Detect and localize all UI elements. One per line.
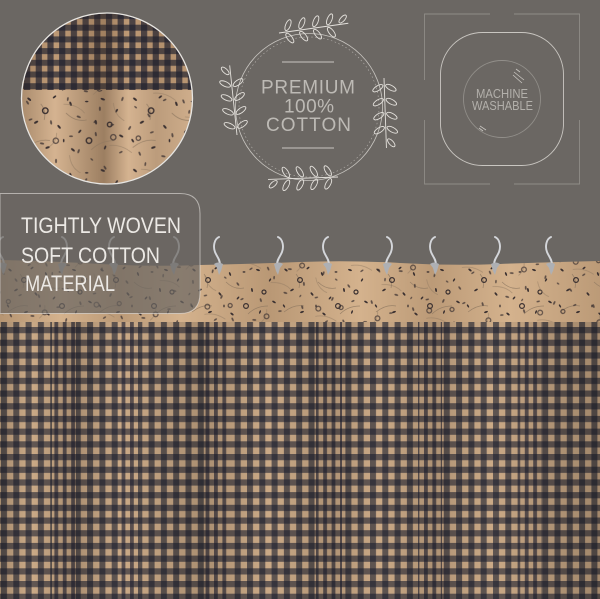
wreath text [261, 78, 355, 136]
panel: tightly woven soft cotton material [0, 194, 200, 314]
callout text: TIGHTLY WOVEN [21, 213, 181, 238]
callout text [21, 213, 181, 296]
rounded square [440, 32, 564, 166]
curtain: shower curtain with check body and floral header [0, 258, 600, 599]
wreath text: 100% [284, 96, 334, 118]
wreath text: COTTON [266, 115, 351, 136]
callout text: MATERIAL [25, 271, 115, 296]
badge: premium 100% cotton wreath [217, 11, 399, 192]
inset floral fabric [20, 90, 195, 186]
inset check fabric [20, 12, 195, 92]
glass glints [479, 69, 524, 131]
callout text: SOFT COTTON [21, 243, 160, 268]
wreath divider lines [282, 62, 334, 148]
corner brackets [424, 14, 580, 184]
check fabric body [0, 322, 600, 599]
wreath rings [236, 34, 382, 180]
inset: fabric close-up circle [20, 12, 195, 186]
machine washable text [472, 86, 533, 113]
inner circle [464, 60, 540, 138]
inset ring [22, 13, 192, 184]
wreath leaves [217, 11, 399, 192]
machine washable text: WASHABLE [472, 98, 533, 113]
machine washable text: MACHINE [476, 86, 528, 101]
curtain hooks [0, 237, 555, 275]
wreath text: PREMIUM [261, 78, 355, 98]
badge: machine washable [424, 14, 580, 184]
translucent callout box [0, 194, 200, 314]
floral header band [0, 260, 600, 322]
